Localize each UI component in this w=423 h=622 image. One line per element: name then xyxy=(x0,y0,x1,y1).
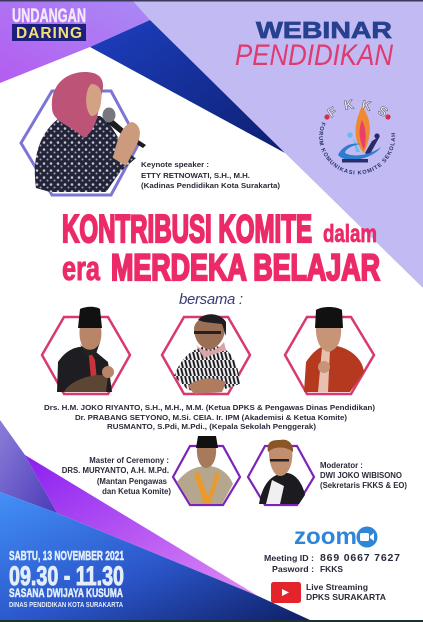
logo: FKKS: K xyxy=(360,97,373,114)
photo: speaker 2 xyxy=(162,314,250,394)
text: live streaming xyxy=(306,582,386,602)
photo: speaker 3 xyxy=(285,307,374,394)
title: era xyxy=(62,250,101,288)
text: meeting details: Meeting ID : xyxy=(264,553,314,563)
badge: undangan daring: UNDANGAN xyxy=(12,6,86,27)
text: master of ceremony: (Mantan Pengawas xyxy=(97,477,168,486)
text: date and venue: 09.30 - 11.30 xyxy=(9,561,124,591)
badge: undangan daring xyxy=(12,6,86,42)
badge: undangan daring: DARING xyxy=(16,25,82,42)
photo: speaker 1 xyxy=(42,307,130,394)
logo: FKKS: FORUM KOMUNIKASI KOMITE SEKOLAH xyxy=(319,122,396,175)
panel: navy triangle xyxy=(90,20,285,153)
text: bersama: bersama : xyxy=(179,291,243,308)
text: live streaming: Live Streaming xyxy=(306,582,368,592)
heading: webinar pendidikan: WEBINAR xyxy=(256,17,392,43)
text: date and venue xyxy=(9,548,124,609)
text: live streaming: DPKS SURAKARTA xyxy=(306,592,386,602)
text: moderator: DWI JOKO WIBISONO xyxy=(320,471,402,480)
text: meeting details: FKKS xyxy=(320,564,343,574)
text: date and venue: SABTU, 13 NOVEMBER 2021 xyxy=(9,548,124,563)
title xyxy=(62,208,380,288)
text: master of ceremony xyxy=(62,456,171,496)
bottom edge xyxy=(0,620,423,622)
text: moderator: Moderator : xyxy=(320,461,363,470)
photo: keynote speaker xyxy=(21,72,146,195)
text: moderator: (Sekretaris FKKS & EO) xyxy=(320,481,407,490)
text: keynote speaker xyxy=(141,160,280,190)
text: master of ceremony: Master of Ceremony : xyxy=(89,456,169,465)
icon: zoom logo: zoom xyxy=(294,523,357,549)
title: dalam xyxy=(323,220,377,248)
top edge xyxy=(0,0,423,2)
photo: master of ceremony xyxy=(173,436,240,505)
text: speakers xyxy=(44,403,375,431)
text: date and venue: DINAS PENDIDIKAN KOTA SURAKARTA xyxy=(9,600,123,609)
text: master of ceremony: dan Ketua Komite) xyxy=(102,487,171,496)
text: speakers: RUSMANTO, S.Pdi, M.Pdi., (Kepala Sekolah Penggerak) xyxy=(107,422,316,431)
text: date and venue: SASANA DWIJAYA KUSUMA xyxy=(9,586,123,600)
logo: FKKS: F xyxy=(325,104,339,121)
text: keynote speaker: (Kadinas Pendidikan Kota Surakarta) xyxy=(141,181,280,190)
text: meeting details xyxy=(264,552,400,574)
text: speakers: Dr. PRABANG SETYONO, M.Si. CEIA. Ir. IPM (Akademisi & Ketua Komite) xyxy=(75,413,347,422)
heading: webinar pendidikan: PENDIDIKAN xyxy=(235,39,393,72)
logo: FKKS: K xyxy=(343,96,355,113)
text: master of ceremony: DRS. MURYANTO, A.H. M.Pd. xyxy=(62,466,169,475)
logo: FKKS xyxy=(319,96,396,175)
text: speakers: Drs. H.M. JOKO RIYANTO, S.H., M.H., M.M. (Ketua DPKS & Pengawas Dinas Pendidikan) xyxy=(44,403,375,412)
text: meeting details: Pasword : xyxy=(272,564,314,574)
panel: bottom violet stripe xyxy=(25,455,258,596)
text: keynote speaker: ETTY RETNOWATI, S.H., M.H. xyxy=(141,171,250,180)
icon: youtube xyxy=(271,582,301,603)
panel: purple corner xyxy=(0,0,150,83)
panel: bottom left slate xyxy=(0,420,57,513)
photo: moderator xyxy=(248,440,314,505)
text: moderator xyxy=(320,461,407,490)
text: meeting details: 869 0667 7627 xyxy=(320,552,400,564)
panel: bottom blue xyxy=(0,492,310,620)
text: keynote speaker: Keynote speaker : xyxy=(141,160,209,169)
logo: FKKS: S xyxy=(376,103,391,120)
panel: lavender corner xyxy=(130,0,423,288)
heading: webinar pendidikan xyxy=(235,17,393,72)
